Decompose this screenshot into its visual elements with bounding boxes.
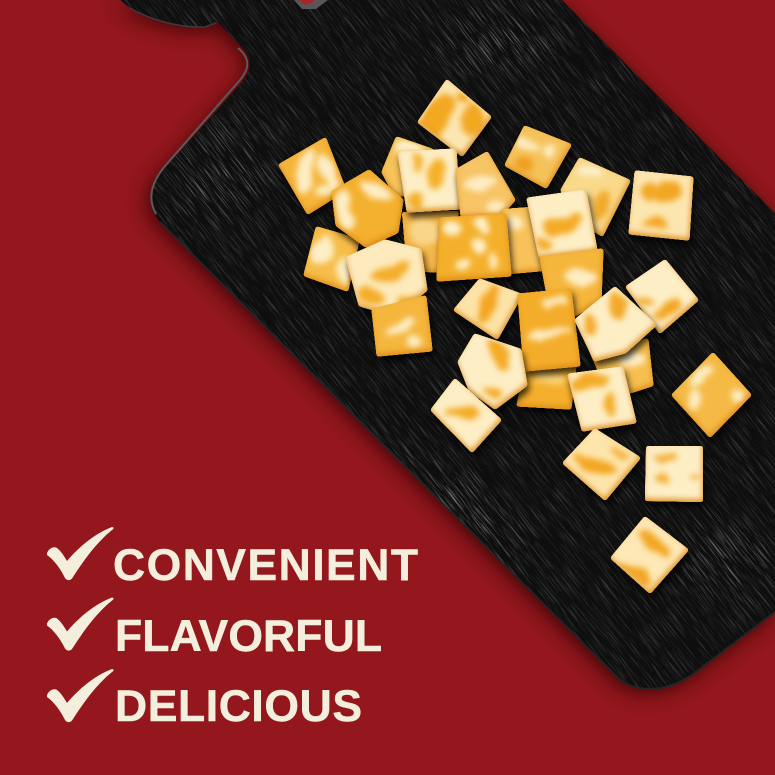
item: convenient: CONVENIENT	[113, 541, 418, 590]
cube: behind left lower	[305, 228, 358, 290]
item: convenient	[47, 527, 418, 590]
cube: angled right	[627, 261, 697, 332]
cube: angled center right	[576, 288, 655, 360]
cube: far right top	[630, 172, 692, 239]
benefits list	[47, 527, 418, 731]
cube: behind center	[403, 212, 458, 272]
item: flavorful: FLAVORFUL	[115, 612, 382, 661]
cube: middle diamond	[455, 280, 521, 338]
cube: left bottom	[373, 297, 431, 355]
cube: lower square	[646, 447, 702, 501]
cheese cubes	[280, 81, 750, 592]
cube: left big front	[347, 241, 426, 315]
cube: center marbled	[438, 215, 510, 280]
cube: top	[409, 81, 490, 155]
icon: check mark	[47, 527, 114, 580]
cube: lower front white	[459, 335, 526, 408]
cutting board	[120, 0, 775, 690]
cube: upper center right	[457, 153, 514, 216]
item: delicious: DELICIOUS	[115, 682, 362, 731]
cube: lower diamond	[564, 430, 639, 499]
cube: lower center	[569, 368, 635, 430]
cube: lower left	[432, 380, 500, 451]
icon: check mark	[47, 669, 114, 722]
cube: back under tall	[518, 365, 575, 408]
cube: back lower right	[591, 340, 652, 392]
cube: behind upper	[383, 138, 432, 195]
board rim highlight	[151, 48, 247, 214]
cube: right diamond	[673, 354, 750, 436]
item: flavorful	[47, 598, 382, 661]
cube: left	[280, 139, 345, 213]
cube: top right of pile	[506, 127, 570, 187]
cube: right center tall	[528, 191, 596, 257]
cube: behind angled right	[562, 159, 629, 235]
cube: bottom diamond	[612, 518, 687, 592]
board shadow	[117, 4, 772, 693]
cube: orange large	[331, 171, 402, 246]
cube: behind narrow	[503, 208, 544, 273]
icon: check mark	[47, 598, 114, 651]
handle hole	[294, 0, 328, 9]
cube: upper center front	[399, 150, 459, 211]
cube: tall center	[519, 290, 579, 370]
cube: above tall	[541, 250, 602, 315]
item: delicious	[47, 669, 362, 731]
